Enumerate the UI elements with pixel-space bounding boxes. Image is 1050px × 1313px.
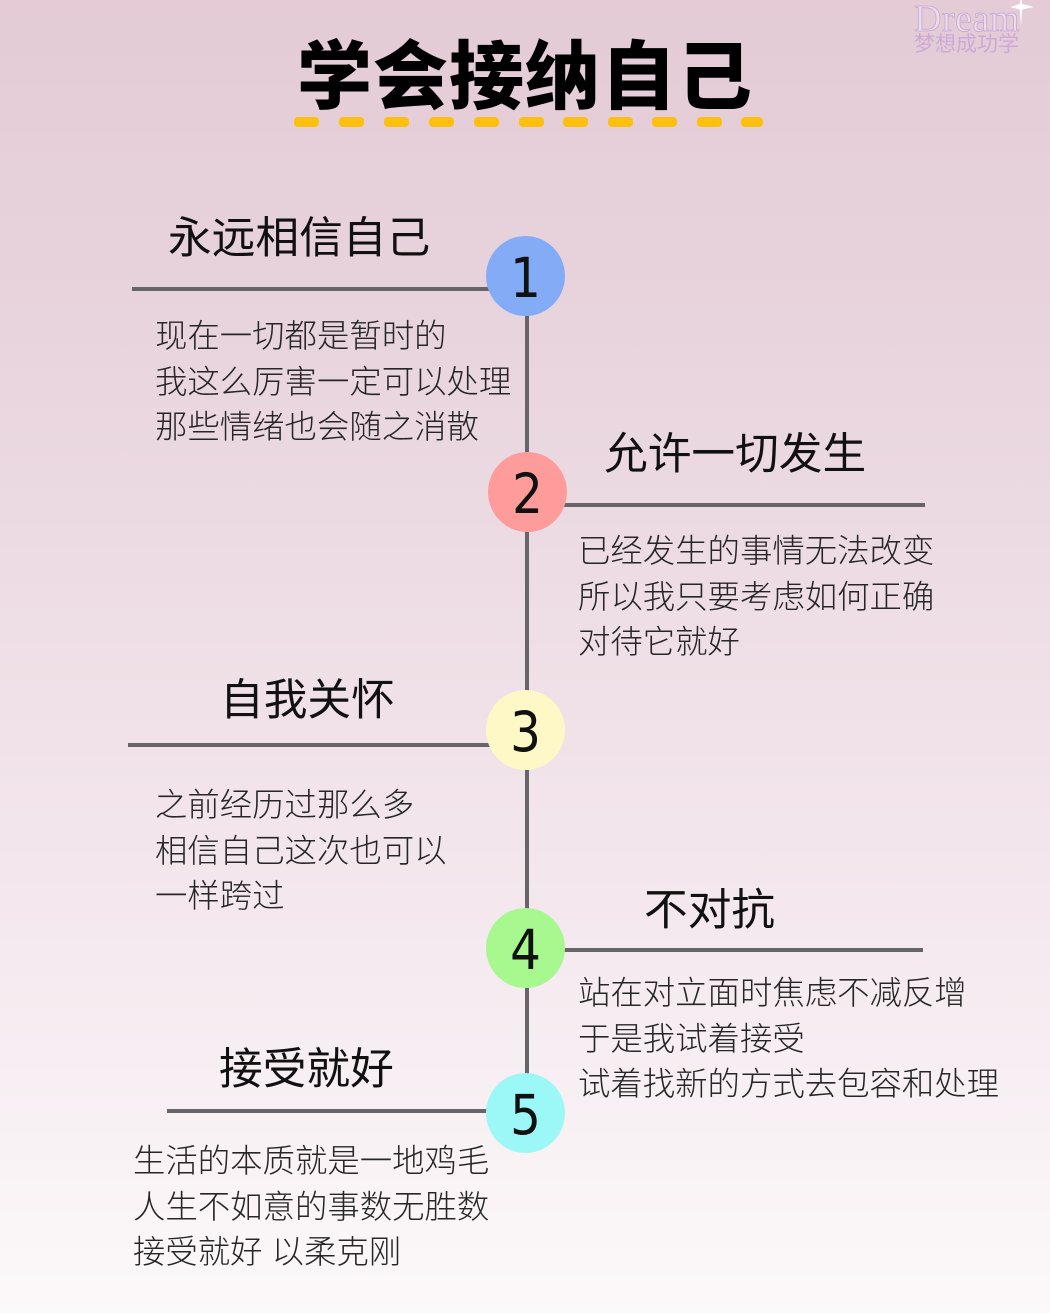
step 1 number circle	[486, 236, 565, 316]
heading 4: 不对抗	[644, 886, 775, 935]
step 5 number circle	[486, 1073, 565, 1153]
text 1	[155, 318, 511, 445]
text 4: 试着找新的方式去包容和处理	[578, 1066, 999, 1102]
step 3 number circle: 3	[510, 700, 541, 764]
text 5: 人生不如意的事数无胜数	[133, 1188, 489, 1224]
text 5: 接受就好 以柔克刚	[133, 1234, 401, 1270]
connector 5	[167, 1109, 490, 1113]
text 2	[578, 533, 934, 660]
text 2: 已经发生的事情无法改变	[578, 533, 934, 569]
text 3: 相信自己这次也可以	[155, 832, 447, 868]
title underline: dashed yellow	[294, 117, 763, 127]
step 3 number circle	[486, 690, 565, 770]
step 2 number circle	[488, 452, 567, 532]
text 2: 所以我只要考虑如何正确	[578, 578, 934, 614]
heading 3: 自我关怀	[220, 676, 395, 725]
step 5 number circle: 5	[510, 1083, 541, 1147]
text 4	[578, 975, 999, 1102]
text 3: 一样跨过	[155, 878, 285, 914]
logo: Dream: 梦想成功学	[914, 33, 1019, 56]
text 5	[133, 1143, 489, 1270]
text 1: 那些情绪也会随之消散	[155, 409, 479, 445]
text 2: 对待它就好	[578, 624, 740, 660]
heading 2: 允许一切发生	[604, 430, 866, 479]
step 4 number circle	[486, 908, 565, 988]
step 4 number circle: 4	[510, 918, 541, 982]
connector 3	[128, 743, 490, 747]
text 4: 站在对立面时焦虑不减反增	[578, 975, 967, 1011]
timeline vertical line	[525, 276, 529, 1116]
title: 学会接纳自己	[297, 35, 753, 119]
connector 1	[132, 287, 492, 291]
logo: Dream	[914, 0, 1034, 56]
step 1 number circle: 1	[510, 246, 541, 310]
text 3	[155, 787, 447, 914]
step 2 number circle: 2	[512, 462, 543, 526]
connector 2	[560, 503, 925, 506]
connector 4	[560, 948, 923, 952]
text 1: 我这么厉害一定可以处理	[155, 364, 511, 400]
text 1: 现在一切都是暂时的	[155, 318, 447, 354]
text 5: 生活的本质就是一地鸡毛	[133, 1143, 489, 1179]
text 3: 之前经历过那么多	[155, 787, 414, 823]
text 4: 于是我试着接受	[578, 1020, 805, 1056]
heading 1: 永远相信自己	[168, 214, 430, 263]
heading 5: 接受就好	[219, 1045, 394, 1094]
